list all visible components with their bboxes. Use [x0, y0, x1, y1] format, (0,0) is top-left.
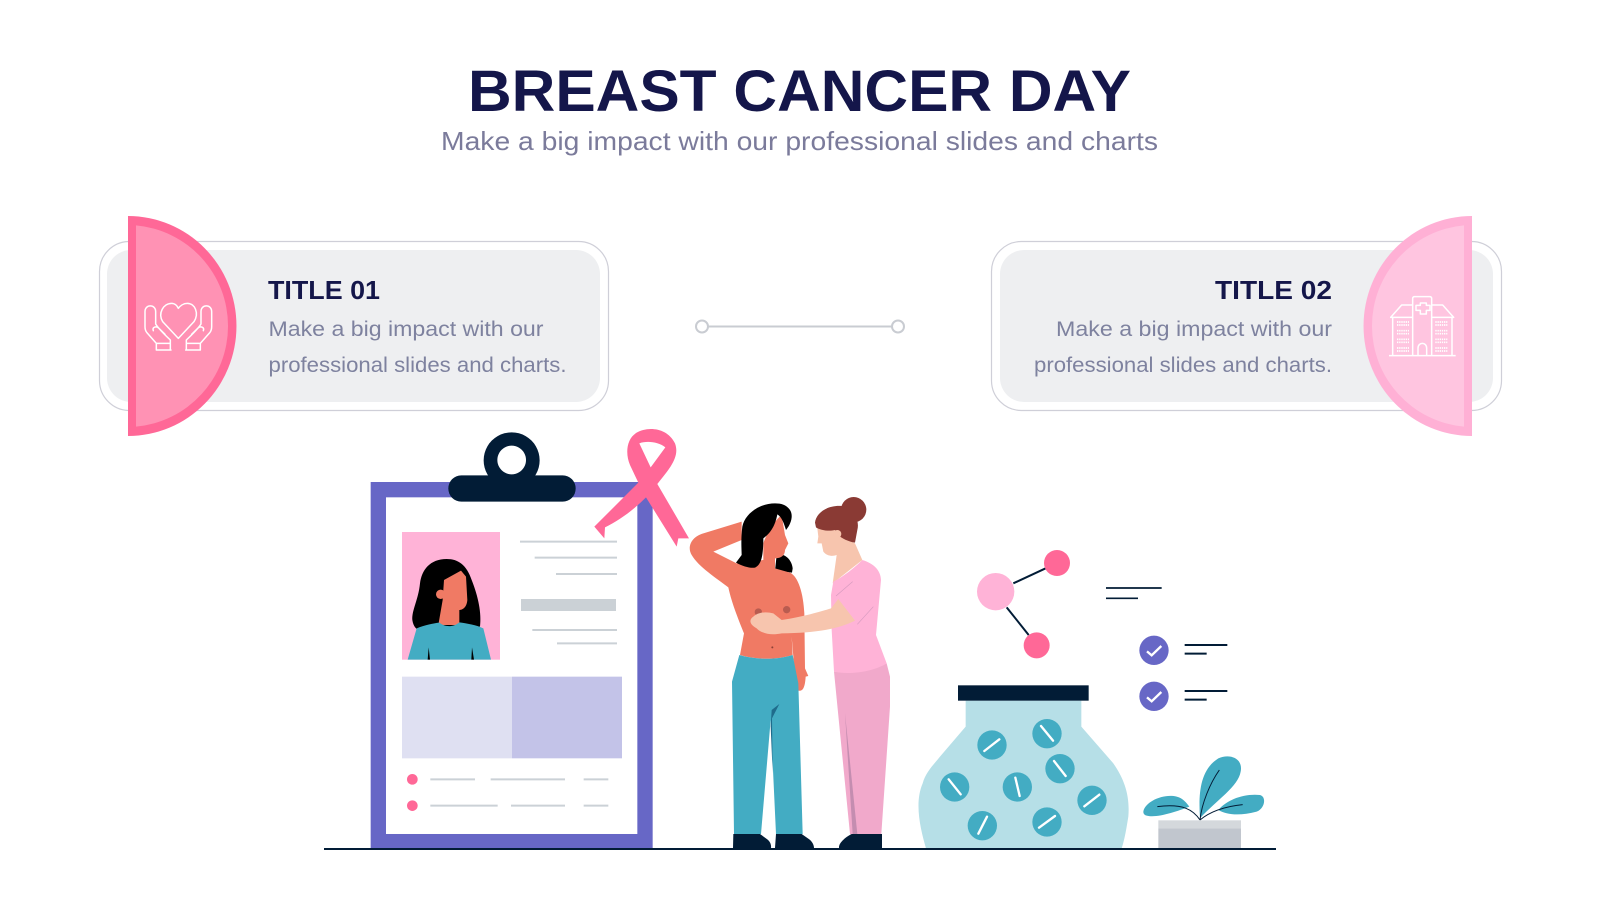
text block: title 01 body: professional slides and charts.: [268, 354, 566, 377]
text block: title 02 body: Make a big impact with our: [1056, 318, 1332, 341]
document chart blocks: [402, 677, 622, 758]
heading: title 02: TITLE 02: [1215, 275, 1332, 305]
checklist: [1139, 636, 1227, 711]
title: BREAST CANCER DAY: [468, 59, 1131, 124]
subtitle: Make a big impact with our professional slides and charts: [441, 126, 1158, 156]
half circle badge: title 02: [1364, 216, 1472, 436]
potted plant: [1143, 756, 1264, 848]
heading: title 01: TITLE 01: [268, 275, 380, 305]
text block: title 01 body: [268, 318, 566, 377]
doctor arm: [750, 599, 855, 634]
note lines: [1106, 588, 1162, 598]
illustration: patient and doctor: [690, 497, 890, 848]
icon: hospital: [1389, 297, 1456, 356]
half circle badge: title 01: [128, 216, 236, 436]
doctor: [815, 497, 890, 848]
text block: title 02 body: [1034, 318, 1332, 377]
text block: title 01 body: Make a big impact with our: [268, 318, 544, 341]
clipboard board: [371, 482, 653, 849]
right side illustration: [918, 550, 1264, 848]
document lines: [520, 542, 617, 643]
patient: [690, 503, 814, 848]
patient photo: [402, 532, 500, 660]
molecule: [977, 550, 1070, 658]
text block: title 02 body: professional slides and charts.: [1034, 354, 1332, 377]
panel: title 02: [992, 216, 1502, 436]
ground line: [324, 848, 1276, 850]
connector: [696, 320, 904, 332]
clipboard illustration: [371, 429, 689, 849]
pill jar: [918, 685, 1129, 848]
pink ribbon: [594, 429, 689, 547]
icon: hands holding heart: [145, 303, 212, 350]
clipboard clip: [448, 432, 576, 502]
document list: [407, 774, 608, 811]
panel: title 01: [100, 216, 608, 436]
